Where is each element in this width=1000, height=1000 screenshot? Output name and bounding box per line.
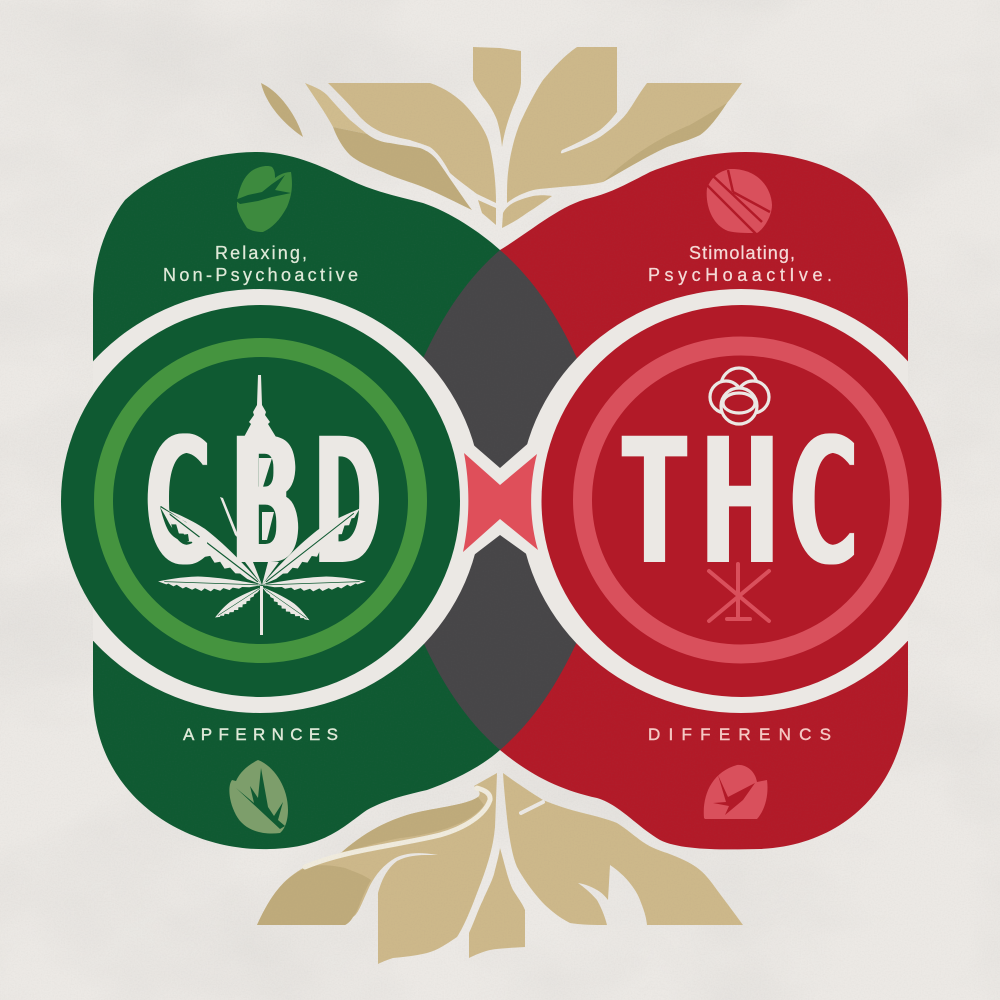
white rings clipped to panels bbox=[93, 289, 908, 713]
THC title: T bbox=[623, 397, 686, 607]
white veins on bottom leaves bbox=[305, 788, 490, 867]
top gold leaves bbox=[261, 47, 742, 228]
THC title: C bbox=[790, 397, 858, 607]
text: Apfernces: APFERNCES bbox=[183, 725, 338, 744]
slash lines bbox=[706, 170, 770, 235]
text: Relaxing: Relaxing, bbox=[215, 243, 307, 263]
panel: shared overlap lens bbox=[420, 250, 580, 750]
text: Non-Psychoactive: Non-Psychoactive bbox=[163, 265, 358, 285]
green leaf veins bbox=[236, 768, 285, 829]
leaf slivers in B counters bbox=[259, 458, 274, 540]
panel: THC background shape bbox=[500, 152, 908, 849]
THC title: H bbox=[701, 398, 779, 607]
icon: red leaf bottom bbox=[704, 765, 768, 819]
icon: molecule rings bbox=[710, 368, 769, 424]
icon: green leaf bottom bbox=[229, 760, 288, 834]
CBD title: B bbox=[230, 398, 303, 608]
crack in green leaf bbox=[235, 175, 291, 204]
icon: red leaf top bbox=[706, 169, 772, 235]
text: Stimolating: Stimolating, bbox=[689, 243, 795, 263]
CBD title: C bbox=[145, 397, 211, 608]
cannabis leaf behind letters bbox=[153, 375, 279, 595]
icon: green leaf top bbox=[235, 166, 292, 232]
panel: CBD background shape bbox=[93, 152, 500, 849]
white vein on bottom right leaf bbox=[521, 802, 543, 813]
CBD title bbox=[145, 397, 381, 608]
text: Differencs: DIFFERENCS bbox=[648, 725, 831, 744]
CBD title: D bbox=[314, 397, 381, 607]
centre red bowtie bbox=[463, 453, 538, 552]
leaf tip through letter C bbox=[160, 506, 189, 542]
text: Psychoactive: PsycHoaactIve. bbox=[648, 265, 832, 285]
badge: THC bbox=[542, 305, 942, 697]
icon: crossed lines bbox=[709, 564, 769, 621]
THC title bbox=[623, 397, 858, 607]
cannabis leaf over letters bbox=[158, 501, 367, 635]
CBD inner ring bbox=[104, 348, 418, 654]
bottom gold leaves bbox=[257, 773, 743, 964]
badge: CBD bbox=[61, 305, 460, 697]
THC inner ring bbox=[582, 346, 900, 654]
red leaf crease bbox=[713, 775, 755, 815]
white connector cross bbox=[450, 440, 550, 558]
